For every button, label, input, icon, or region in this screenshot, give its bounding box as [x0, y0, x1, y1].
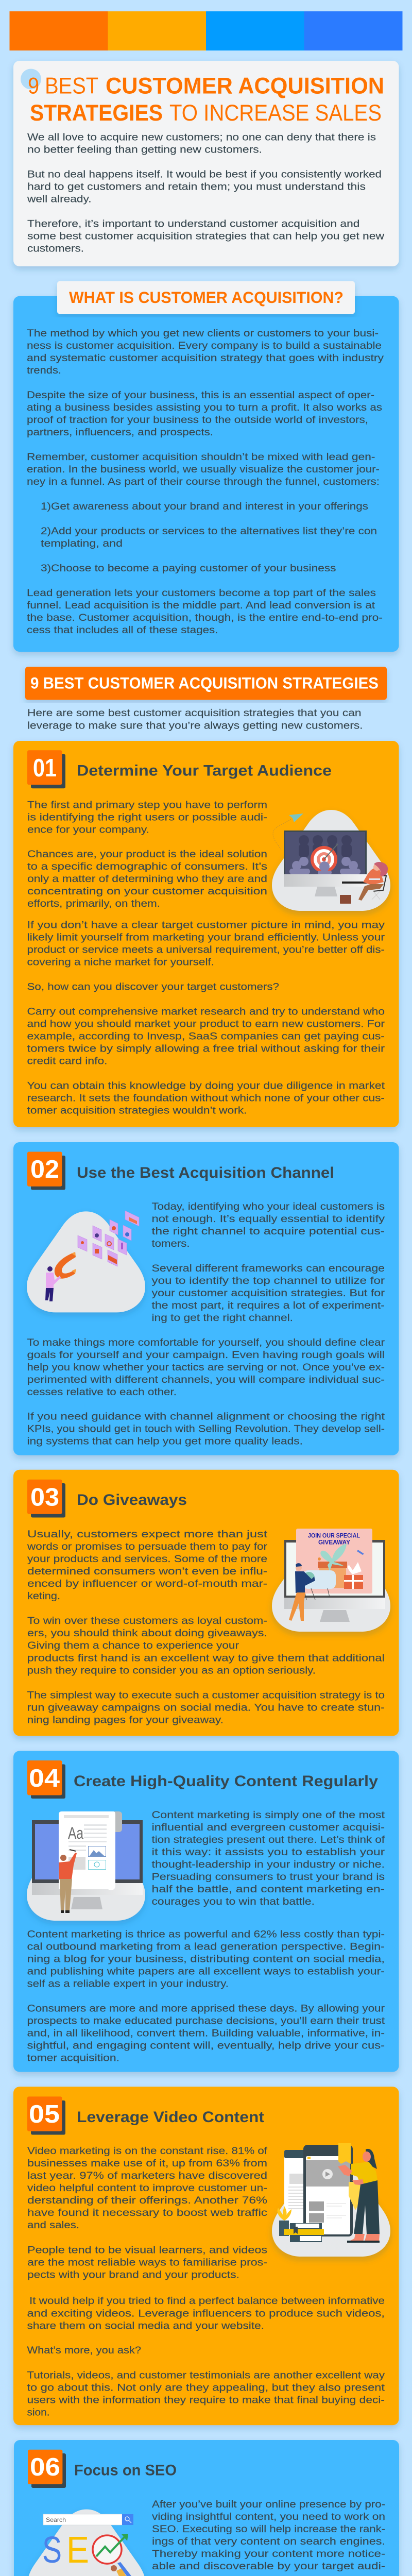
body text: prospects to make educated purchase decisions, you’ll earn their trust	[27, 2015, 385, 2027]
definition text: trends.	[27, 365, 61, 376]
illustration: content page on monitor	[27, 1811, 145, 1921]
body text: If you don’t have a clear target customer picture in mind, you may	[27, 920, 385, 931]
body text: Content marketing is thrice as powerful and 62% less costly than typi-	[27, 1928, 385, 1940]
body text: able and discoverable by your target audi-	[152, 2561, 385, 2572]
title: TO INCREASE SALES	[169, 100, 382, 126]
body text: keting.	[27, 1590, 60, 1602]
body text: ing to get the right channel.	[151, 1312, 293, 1324]
heading: Do Giveaways	[77, 1492, 187, 1509]
body text: It would help if you tried to find a perfect balance between informative	[29, 2295, 385, 2307]
number badge 04: 04	[29, 1765, 60, 1792]
definition text: ness is customer acquisition. Every company is to build a sustainable	[27, 340, 382, 351]
body text: The simplest way to execute such a customer acquisition strategy is to	[27, 1690, 385, 1701]
body text: is identifying the right users or possible audi-	[27, 812, 267, 823]
intro text: We all love to acquire new customers; no one can deny that there is	[27, 131, 376, 143]
section intro text: Here are some best customer acquisition strategies that you can	[27, 707, 362, 719]
definition text: templating, and	[41, 538, 123, 549]
body text: What’s more, you ask?	[27, 2345, 141, 2356]
number badge 06	[28, 2450, 66, 2488]
definition text: funnel. Lead acquisition is the middle part. And lead conversion is at	[27, 600, 375, 611]
body text: video helpful content to improve customer un-	[27, 2182, 267, 2194]
heading	[57, 281, 355, 314]
number badge 03: 03	[30, 1483, 59, 1511]
number badge 06: 06	[30, 2453, 60, 2481]
body text: products first hand is an excellent way to give them that additional	[27, 1653, 385, 1664]
body text: self as a reliable expert in your industry.	[27, 1978, 229, 1989]
number badge 05: 05	[29, 2100, 60, 2128]
illustration: SEO search: S	[42, 2530, 62, 2571]
body text: pects with your brand and your products.	[27, 2269, 239, 2280]
body text: your products and services. Some of the more	[27, 1553, 267, 1565]
definition text	[27, 328, 384, 636]
body text: Several different frameworks can encourage	[151, 1263, 385, 1274]
illustration: SEO search	[27, 2510, 146, 2576]
body text: Tutorials, videos, and customer testimonials are another excellent way	[27, 2369, 385, 2381]
body text: Giving them a chance to experience your	[27, 1640, 239, 1651]
definition text: The method by which you get new clients or customers to your busi-	[27, 328, 379, 339]
body text: to a specific demographic of consumers. It’s	[27, 861, 267, 872]
heading: Determine Your Target Audience	[77, 762, 332, 779]
panel: strategy 05	[13, 2087, 399, 2425]
intro text	[27, 131, 385, 254]
body text: Today, identifying who your ideal customers is	[151, 1201, 385, 1212]
body text: thought-leadership in your industry or niche.	[151, 1859, 385, 1870]
body text: So, how can you discover your target customers?	[27, 981, 279, 993]
body text: half the battle, and content marketing en-	[151, 1884, 385, 1895]
heading: Create High-Quality Content Regularly	[74, 1773, 378, 1790]
body text: tion strategies present out there. Let’s think of	[151, 1834, 385, 1845]
definition text: eration. In the business world, we usually visualize the customer jour-	[27, 464, 380, 475]
body text: covering a niche market for yourself.	[27, 957, 214, 968]
body text	[27, 2145, 385, 2418]
illustration: content page on monitor: Aa	[68, 1824, 83, 1842]
body text: have found it necessary to boost web traffic	[27, 2207, 267, 2218]
body text: run giveaway campaigns on social media. You have to create stun-	[27, 1702, 385, 1714]
body text: determined consumers won’t even be influ-	[27, 1566, 267, 1577]
illustration: SEO search: Search	[46, 2516, 66, 2523]
intro text: well already.	[27, 193, 92, 205]
body text: tomers.	[151, 1238, 190, 1249]
definition text: Despite the size of your business, this is an essential aspect of oper-	[27, 389, 374, 401]
body text: words or promises to persuade them to pay for	[27, 1541, 268, 1552]
body text: the most part, it requires a lot of experiment-	[151, 1300, 385, 1311]
body text: Persuading consumers to trust your brand is	[151, 1871, 385, 1883]
definition text: Lead generation lets your customers become a top part of the sales	[27, 587, 376, 599]
body text: cesses relative to each other.	[27, 1386, 177, 1398]
body text	[27, 2499, 386, 2576]
body text: Video marketing is on the constant rise. 81% of	[27, 2145, 268, 2157]
body text: Chances are, your product is the ideal solution	[27, 849, 267, 860]
intro text: customers.	[27, 243, 84, 254]
body text: influential and evergreen customer acquisi-	[151, 1822, 385, 1833]
panel: strategy 02	[13, 1142, 399, 1455]
body text	[27, 1809, 385, 2064]
body text: Carry out comprehensive market research and try to understand who	[27, 1006, 385, 1018]
body text: enced by influencer or word-of-mouth mar-	[27, 1578, 267, 1589]
body text: tomers twice by simply allowing a free trial without asking for their	[27, 1043, 385, 1055]
body text: share them on social media and your website.	[27, 2320, 264, 2331]
body text: example, according to Invesp, SaaS companies can get paying cus-	[27, 1031, 385, 1042]
definition text: the base. Customer acquisition, though, is the entire end-to-end pro-	[27, 612, 383, 623]
body text: credit card info.	[27, 1056, 107, 1067]
body text	[27, 1529, 385, 1726]
panel: strategy 01	[13, 741, 399, 1127]
body text: you to identify the top channel to utilize for	[151, 1275, 385, 1286]
section intro text: leverage to make sure that you’re always getting new customers.	[27, 720, 363, 731]
body text	[27, 800, 385, 1116]
number badge 03	[27, 1480, 65, 1518]
section banner: 9 BEST CUSTOMER ACQUISITION STRATEGIES	[30, 674, 379, 692]
definition text: Remember, customer acquisition shouldn’t be mixed with lead gen-	[27, 451, 375, 463]
body text: and how you should market your product to earn new customers. For	[27, 1019, 385, 1030]
body text: courages you to win that battle.	[151, 1896, 315, 1907]
title	[28, 74, 384, 126]
body text: perimented with different channels, you will compare individual suc-	[27, 1374, 385, 1385]
intro text: But no deal happens itself. It would be best if you consistently worked	[27, 168, 382, 180]
intro text: some best customer acquisition strategies that can help you get new	[27, 230, 385, 242]
definition text: proof of traction for your business to the outside world of investors,	[27, 414, 368, 426]
title: STRATEGIES	[30, 100, 163, 126]
body text: People tend to be visual learners, and videos	[27, 2244, 267, 2256]
body text: the right channel to acquire potential cus-	[151, 1226, 385, 1237]
definition text: ney in a funnel. As part of their course through the funnel, customers:	[27, 476, 380, 487]
body text: tomer acquisition.	[27, 2053, 119, 2064]
illustration: video on phone with woman	[272, 2143, 390, 2257]
body text: and publishing white papers are all excellent ways to establish your-	[27, 1965, 385, 1977]
body text: push they require to consider you as an option seriously.	[27, 1665, 316, 1676]
section intro text	[27, 707, 363, 731]
body text: To win over these customers as loyal custom-	[27, 1615, 267, 1626]
body text: ning a blog for your business, distributing content on social media,	[27, 1953, 385, 1964]
body text: concentrating on your customer acquisition	[27, 886, 267, 897]
illustration: giveaway poster on monitor	[272, 1529, 390, 1632]
body text: KPIs, you should get in touch with Selling Revolution. They develop sell-	[27, 1423, 385, 1434]
body text: The first and primary step you have to perform	[27, 800, 267, 811]
body text: it this way: it assists you to establish your	[151, 1846, 385, 1858]
body text: and, in all likelihood, convert them. Building valuable, informative, in-	[27, 2028, 385, 2039]
body text: To make things more comfortable for yourself, you should define clear	[27, 1337, 385, 1348]
definition text: cess that includes all of these stages.	[27, 624, 218, 636]
body text: likely limit yourself from marketing your brand efficiently. Unless your	[27, 932, 385, 943]
definition text: ating a business besides assisting you to turn a profit. It also works as	[27, 402, 382, 413]
heading: WHAT IS CUSTOMER ACQUISITION?	[69, 289, 344, 307]
body text: After you’ve built your online presence by pro-	[152, 2499, 385, 2510]
body text: You can obtain this knowledge by doing your due diligence in market	[27, 1080, 385, 1092]
panel: strategy 06	[14, 2440, 399, 2576]
illustration: giveaway poster on monitor: JOIN OUR SPECIAL	[308, 1532, 360, 1539]
section banner	[25, 667, 387, 700]
body text: goals for yourself and your campaign. Even having rough goals will	[27, 1349, 385, 1361]
heading: Leverage Video Content	[77, 2109, 264, 2126]
number badge 05	[27, 2096, 65, 2135]
panel: strategy 03	[13, 1470, 399, 1736]
body text: help you know whether your tactics are serving or not. Once you’ve ex-	[27, 1362, 385, 1373]
heading: Focus on SEO	[74, 2462, 177, 2479]
illustration: SEO search: E	[66, 2530, 89, 2571]
body text: viding insightful content, you need to work on	[152, 2511, 385, 2522]
body text: to go about this. Not only are they appealing, but they also present	[27, 2382, 385, 2393]
body text: businesses make use of it, up from 63% from	[27, 2158, 267, 2169]
body text: SEO. Executing so will help increase the rank-	[152, 2523, 385, 2535]
body text: derstanding of their offerings. Another 76%	[27, 2195, 267, 2206]
illustration: magnet attracting channels	[27, 1211, 145, 1312]
number badge 02: 02	[30, 1156, 59, 1183]
body text: and exciting videos. Leverage influencers to produce such videos,	[27, 2308, 385, 2319]
body text: ing systems that can help you get more quality leads.	[27, 1435, 303, 1447]
illustration: audience target on monitor	[272, 810, 390, 911]
body text: efforts, primarily, on them.	[27, 898, 160, 909]
intro text: hard to get customers and retain them; you must understand this	[27, 181, 366, 192]
body text	[27, 1201, 385, 1447]
body text: your customer acquisition strategies. But for	[151, 1287, 385, 1299]
body text: If you need guidance with channel alignment or choosing the right	[27, 1411, 385, 1422]
body text: sightful, and engaging content will, eventually, help drive your cus-	[27, 2040, 385, 2052]
panel: strategy 04	[13, 1751, 399, 2072]
body text: and sales.	[27, 2219, 79, 2231]
body text: users with the information they require to make that final buying deci-	[27, 2394, 385, 2405]
body text: tomer acquisition strategies wouldn’t work.	[27, 1105, 247, 1116]
definition text: 1)Get awareness about your brand and interest in your offerings	[41, 501, 368, 512]
body text: Consumers are more and more apprised these days. By allowing your	[27, 2003, 385, 2014]
body text: cal outbound marketing from a lead generation perspective. Begin-	[27, 1941, 385, 1952]
body text: Content marketing is simply one of the most	[151, 1809, 385, 1821]
body text: Thereby making your content more notice-	[152, 2548, 385, 2560]
definition text: and systematic customer acquisition strategy that goes with industry	[27, 352, 384, 364]
intro text: no better feeling than getting new customers.	[27, 144, 262, 155]
body text: not enough. It’s equally essential to identify	[151, 1213, 385, 1225]
body text: research. It sets the foundation without which none of your other cus-	[27, 1093, 385, 1104]
colour band	[9, 11, 403, 50]
title: 9 BEST	[28, 74, 98, 99]
body text: last year. 97% of marketers have discovered	[27, 2170, 267, 2181]
body text: ers, you should think about doing giveaways.	[27, 1628, 267, 1639]
panel: introduction	[13, 61, 399, 266]
title: CUSTOMER ACQUISITION	[106, 74, 384, 99]
definition text: 3)Choose to become a paying customer of your business	[41, 563, 336, 574]
definition text: 2)Add your products or services to the alternatives list they’re con	[41, 526, 377, 537]
definition text: partners, influencers, and prospects.	[27, 427, 213, 438]
number badge 02	[27, 1152, 65, 1190]
intro text: Therefore, it’s important to understand customer acquisition and	[27, 218, 359, 229]
number badge 01: 01	[33, 754, 57, 782]
body text: ings of that very content on search engines.	[152, 2536, 385, 2547]
body text: ence for your company.	[27, 824, 149, 836]
body text: sion.	[27, 2406, 49, 2418]
body text: Usually, customers expect more than just	[27, 1529, 268, 1540]
number badge 04	[27, 1760, 65, 1799]
body text: only a matter of determining who they are and	[27, 873, 267, 885]
body text: product or service meets a universal requirement, you’re better off dis-	[27, 944, 385, 956]
illustration: giveaway poster on monitor: GIVEAWAY	[318, 1538, 350, 1546]
number badge 01	[27, 750, 65, 788]
body text: ning landing pages for your giveaway.	[27, 1715, 224, 1726]
body text: are the most reliable ways to familiarise pros-	[27, 2257, 267, 2268]
panel: what is customer acquisition	[13, 281, 399, 652]
heading: Use the Best Acquisition Channel	[77, 1164, 334, 1181]
